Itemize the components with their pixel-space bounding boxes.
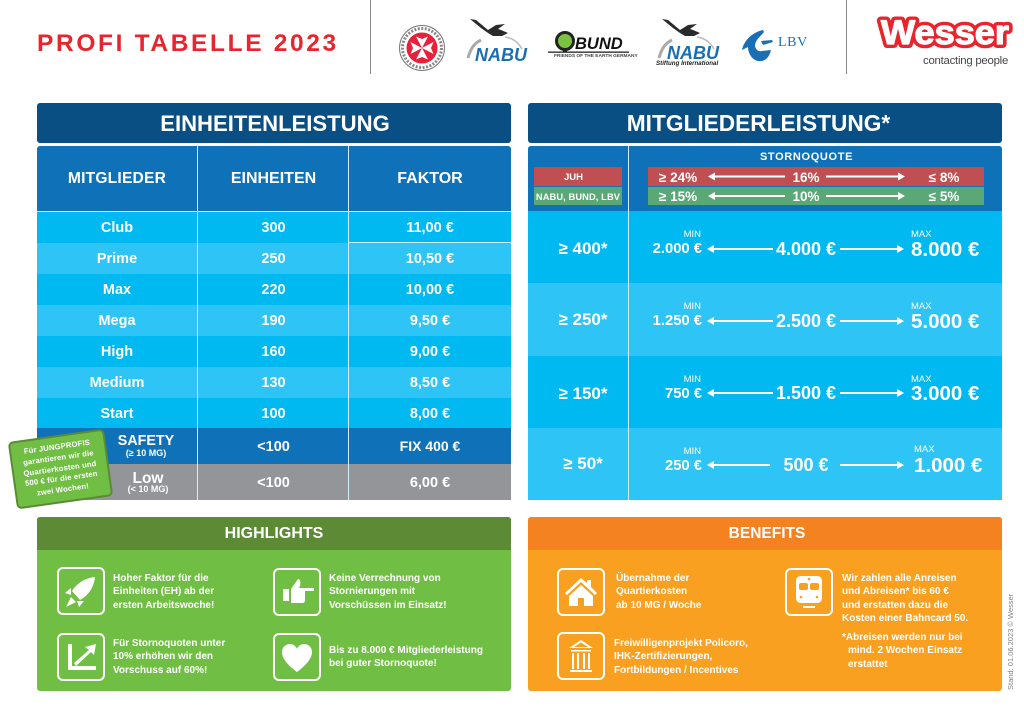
row: 150	[528, 356, 1002, 428]
title: PROFI TABELLE 2023	[37, 30, 339, 57]
logo: LBV	[742, 30, 808, 62]
label: JUH: JUH	[564, 172, 583, 183]
red quota bar: 16%	[792, 170, 820, 185]
row: Prime	[37, 243, 511, 274]
row: Mega: 9,50 €	[410, 313, 450, 329]
green quota bar	[648, 187, 984, 205]
row: Medium: Medium	[90, 375, 144, 391]
callout: Jungprofis: Für JUNGPROFIS	[23, 438, 90, 456]
logo: NABU	[466, 19, 528, 65]
item: rocket: Hoher Faktor für die	[113, 573, 209, 584]
item: heart: Bis zu 8.000 € Mitgliederleistung	[329, 645, 483, 656]
table header	[37, 146, 511, 212]
row: 400: MIN	[684, 229, 701, 240]
item: train: erstattet	[848, 659, 887, 670]
table header: EINHEITEN	[231, 170, 316, 187]
row: Low	[37, 464, 511, 500]
logo: NABU: NABU	[475, 45, 527, 65]
row: 250: MIN	[684, 301, 701, 312]
item: rocket: Einheiten (EH) ab der	[113, 586, 214, 597]
item: house: Übernahme der	[616, 573, 689, 584]
row: Start: 100	[261, 406, 286, 422]
row: Mega	[37, 305, 511, 336]
item: train: und Abreisen* bis 60 €	[842, 586, 949, 597]
heading: Mitgliederleistung	[528, 103, 1002, 143]
row: Prime: 250	[261, 251, 286, 267]
row: 50: 1.000 €	[914, 454, 982, 477]
row: Prime: 10,50 €	[406, 251, 454, 267]
item: thumb: Keine Verrechnung von	[329, 573, 441, 584]
label: JUH	[534, 167, 622, 186]
row: Safety: FIX 400 €	[400, 438, 460, 454]
row: Start: 8,00 €	[410, 406, 450, 422]
table header: MITGLIEDER	[68, 170, 166, 187]
heading: Benefits	[528, 517, 1002, 550]
item: building	[557, 632, 748, 680]
logo: LBV: LBV	[778, 35, 808, 50]
row: Club: Club	[101, 220, 133, 236]
logo: NABU Stiftung International	[656, 19, 720, 67]
row: 250: 1.250 €	[653, 313, 702, 329]
row: 50: ≥ 50*	[563, 454, 603, 473]
row: 50: 500 €	[783, 455, 829, 475]
row: 50: 250 €	[665, 458, 702, 474]
panel: Highlights	[37, 517, 511, 691]
row: Medium	[37, 367, 511, 398]
row: Low: 6,00 €	[410, 475, 450, 491]
row: High: 9,00 €	[410, 344, 450, 360]
header divider left	[370, 0, 371, 74]
red quota bar: ≥ 24%	[659, 170, 697, 185]
logo: Wesser: contacting people	[923, 55, 1008, 67]
row: Medium: 8,50 €	[410, 375, 450, 391]
logo: BUND: BUND	[575, 35, 623, 53]
green quota bar: 10%	[792, 189, 820, 204]
heading: Benefits: BENEFITS	[729, 525, 805, 542]
row: Safety: (≥ 10 MG)	[126, 448, 166, 458]
logo: Wesser	[876, 14, 1013, 67]
red quota bar: ≤ 8%	[929, 170, 959, 185]
item: building: IHK-Zertifizierungen,	[614, 651, 712, 662]
logo: Wesser: Wesser	[881, 14, 1009, 52]
green quota bar: ≥ 15%	[659, 189, 697, 204]
panel: Benefits	[528, 517, 1002, 691]
row: 250	[528, 283, 1002, 356]
item: building: Fortbildungen / Incentives	[614, 665, 738, 676]
row: Safety: SAFETY	[118, 433, 174, 449]
callout: Jungprofis: zwei Wochen!	[36, 481, 90, 498]
row: 50	[528, 428, 1002, 500]
row: Mega: Mega	[98, 313, 136, 329]
item: train	[785, 568, 968, 670]
heading: Einheitenleistung: EINHEITENLEISTUNG	[160, 111, 390, 136]
label: NABU BUND LBV: NABU, BUND, LBV	[536, 192, 620, 202]
row: 400: ≥ 400*	[558, 239, 608, 258]
item: growth arrow: Für Stornoquoten unter	[113, 638, 225, 649]
logo: Johanniter	[399, 25, 445, 71]
row: High: High	[101, 344, 133, 360]
item: thumb: Stornierungen mit	[329, 586, 415, 597]
row: 250: ≥ 250*	[558, 310, 608, 329]
item: growth arrow	[57, 633, 226, 681]
row: Safety: <100	[257, 439, 290, 455]
callout: Jungprofis: garantieren wir die	[22, 448, 94, 467]
panel: Einheitenleistung table	[37, 146, 511, 500]
logo: BUND	[548, 31, 638, 59]
row: Safety	[37, 428, 511, 464]
row: Max	[37, 274, 511, 305]
label: NABU BUND LBV	[534, 187, 622, 205]
footnote: date stamp: Stand: 01.06.2023 © Wesser	[1006, 594, 1015, 690]
row: Mega: 190	[261, 313, 286, 329]
item: train: und erstatten dazu die	[842, 600, 948, 611]
logo: BUND: FRIENDS OF THE EARTH GERMANY	[554, 54, 638, 59]
row: 400: 4.000 €	[776, 239, 836, 259]
row: Low: <100	[257, 475, 290, 491]
logo: NABU Stiftung International: Stiftung International	[656, 60, 718, 67]
item: heart: bei guter Stornoquote!	[329, 658, 437, 669]
row: 250: 5.000 €	[911, 310, 979, 333]
row: High: 160	[261, 344, 286, 360]
item: house: ab 10 MG / Woche	[616, 600, 701, 611]
callout: Jungprofis: 500 € für die ersten	[25, 469, 98, 488]
row: Start	[37, 398, 511, 428]
row: Club	[37, 212, 511, 243]
row: 150: 1.500 €	[776, 383, 836, 403]
item: rocket	[57, 567, 214, 615]
item: thumb	[273, 568, 447, 616]
item: house	[557, 568, 702, 616]
item: rocket: ersten Arbeitswoche!	[113, 600, 214, 611]
row: Max: Max	[103, 282, 131, 298]
item: thumb: Vorschüssen im Einsatz!	[329, 600, 447, 611]
item: train: Wir zahlen alle Anreisen	[842, 573, 957, 584]
logo: Wesser: Wesser	[881, 14, 1009, 52]
row: 400: 8.000 €	[911, 238, 979, 261]
row: 250: MAX	[911, 301, 932, 312]
item: train: Kosten einer Bahncard 50.	[842, 613, 968, 624]
row: Club: 300	[261, 220, 286, 236]
item: heart	[273, 633, 483, 681]
row: Club: 11,00 €	[406, 220, 454, 236]
row: 50: MAX	[914, 444, 935, 455]
heading: Highlights	[37, 517, 511, 550]
row: Prime: Prime	[97, 251, 137, 267]
row: 400: MAX	[911, 229, 932, 240]
heading: Mitgliederleistung: MITGLIEDERLEISTUNG*	[627, 110, 890, 136]
Stornoquote header	[528, 146, 1002, 211]
row: 250: 2.500 €	[776, 311, 836, 331]
row: 400: 2.000 €	[653, 241, 702, 257]
callout: Jungprofis	[8, 429, 113, 509]
item: house: Quartierkosten	[616, 586, 687, 597]
row: 400	[528, 211, 1002, 283]
row: 150: 750 €	[665, 386, 702, 402]
heading: Einheitenleistung	[37, 103, 511, 143]
heading: Highlights: HIGHLIGHTS	[225, 525, 323, 542]
row: High	[37, 336, 511, 367]
panel: Mitgliederleistung table	[528, 146, 1002, 500]
row: 50: MIN	[684, 446, 701, 457]
row: Low: (< 10 MG)	[128, 484, 168, 494]
row: 150: MIN	[684, 374, 701, 385]
row: Max: 10,00 €	[406, 282, 454, 298]
item: growth arrow: 10% erhöhen wir den	[113, 651, 213, 662]
row: Max: 220	[261, 282, 286, 298]
callout: Jungprofis: Quartierkosten und	[23, 459, 97, 478]
item: building: Freiwilligenprojekt Policoro,	[614, 638, 748, 649]
row: Low: Low	[132, 470, 164, 487]
header divider right	[846, 0, 847, 74]
table header: FAKTOR	[397, 170, 463, 187]
Stornoquote header: STORNOQUOTE	[760, 151, 853, 163]
row: 150: MAX	[911, 374, 932, 385]
row: Medium: 130	[261, 375, 286, 391]
row: Start: Start	[100, 406, 134, 422]
green quota bar: ≤ 5%	[929, 189, 959, 204]
red quota bar	[648, 167, 984, 186]
logo: NABU Stiftung International: NABU	[667, 43, 719, 63]
item: growth arrow: Vorschuss auf 60%!	[113, 665, 207, 676]
row: 150: 3.000 €	[911, 382, 979, 405]
item: train: *Abreisen werden nur bei	[842, 632, 963, 643]
item: train: mind. 2 Wochen Einsatz	[848, 645, 962, 656]
row: 150: ≥ 150*	[558, 384, 608, 403]
